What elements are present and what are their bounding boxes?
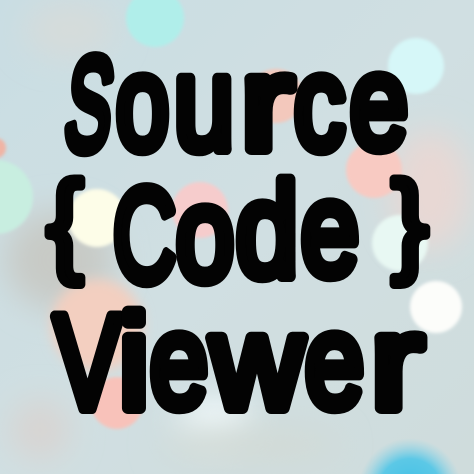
title: Viewer: e — [305, 288, 364, 436]
title: Source: r — [241, 30, 293, 178]
title: Viewer: w — [210, 289, 304, 437]
title: Source: c — [294, 30, 345, 178]
title: Source: u — [174, 30, 234, 178]
title: Viewer: e — [150, 288, 208, 436]
title: Viewer: r — [371, 289, 423, 437]
word: Code: o — [176, 161, 234, 309]
title: Source: e — [350, 29, 408, 177]
left brace: { — [47, 159, 83, 285]
title: { Code } — [47, 156, 428, 310]
word: Code: C — [113, 162, 176, 310]
word: Code: d — [236, 157, 298, 305]
title: Viewer: V — [54, 289, 121, 437]
word: Code: e — [301, 156, 359, 304]
title: Source: S — [59, 30, 121, 179]
title: Source — [59, 29, 408, 179]
right brace: } — [392, 159, 428, 285]
title: Viewer: i — [119, 289, 149, 437]
title: Viewer — [54, 288, 423, 437]
title: Source: o — [116, 30, 169, 178]
word: Code — [113, 156, 359, 310]
